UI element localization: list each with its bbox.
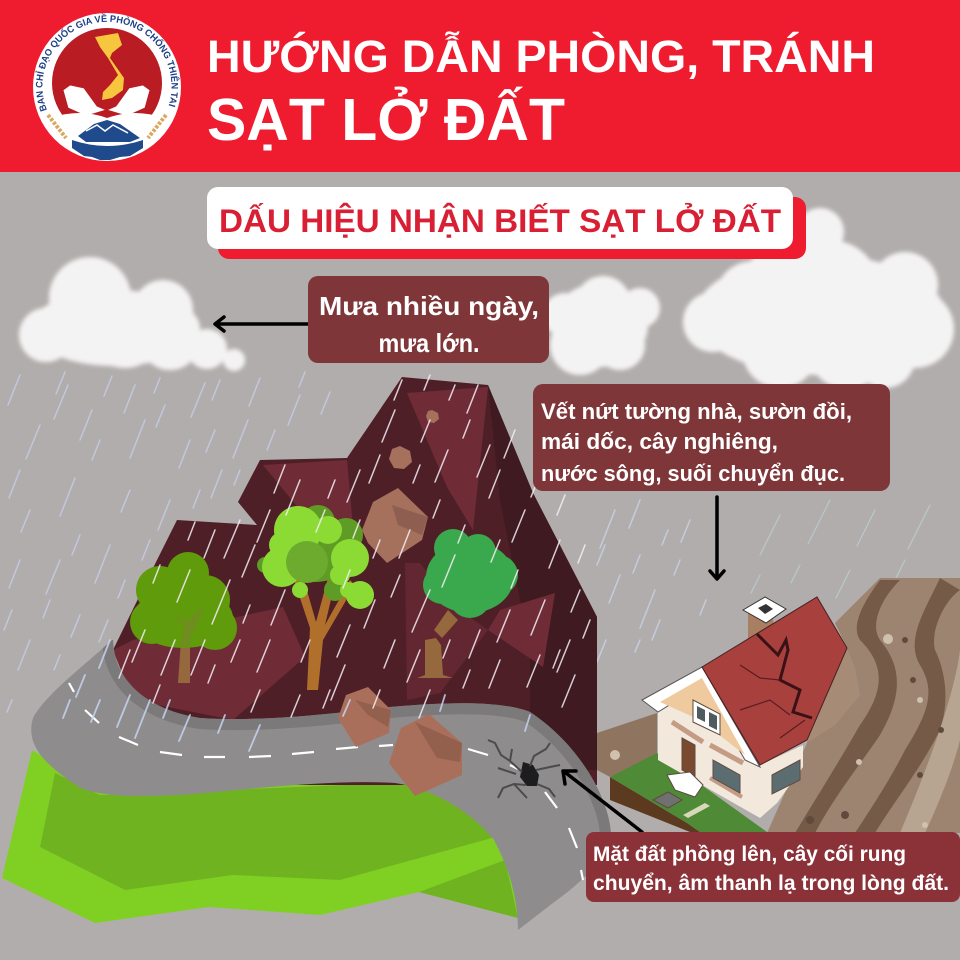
- tree: left: [130, 552, 237, 683]
- arrow: to cloud: [215, 317, 308, 331]
- rocks on road: [338, 687, 462, 796]
- house walls: [658, 672, 803, 818]
- road centre dashes: [69, 683, 583, 880]
- hillside with house: [597, 578, 960, 833]
- mountain: [113, 377, 597, 785]
- chimney: [743, 597, 786, 640]
- cracked roof: [702, 597, 847, 765]
- callout: ground swelling: Mặt đất phồng lên, cây cối rung: [593, 843, 906, 866]
- hillside soil: [597, 578, 960, 833]
- callout: cracks: mái dốc, cây nghiêng,: [541, 429, 778, 454]
- callout: ground swelling: chuyển, âm thanh lạ trong lòng đất.: [593, 872, 949, 895]
- header banner: [0, 0, 960, 172]
- cloud: middle: [543, 276, 660, 375]
- callout: ground swelling: [586, 832, 960, 902]
- title line 1: HƯỚNG DẪN PHÒNG, TRÁNH: [207, 31, 875, 82]
- callout: heavy rain: mưa lớn.: [378, 328, 480, 358]
- ground plot: [610, 777, 700, 832]
- clouds: [19, 208, 954, 389]
- callout: heavy rain: Mưa nhiều ngày,: [319, 291, 539, 321]
- rain in front of scene: [63, 375, 590, 751]
- cloud: right: [683, 208, 954, 389]
- green hill base: [2, 750, 520, 923]
- cloud: left: [19, 257, 245, 371]
- road: [31, 640, 611, 930]
- arrow: to road crack: [563, 771, 642, 832]
- title line 2: SẠT LỞ ĐẤT: [207, 86, 565, 153]
- road crack: [488, 740, 560, 798]
- heading: warning signs: DẤU HIỆU NHẬN BIẾT SẠT LỞ ĐẤT: [219, 203, 781, 239]
- callout: cracks: [533, 384, 890, 491]
- tree: middle: [257, 505, 374, 690]
- tree: right, snapped trunk: [417, 529, 518, 678]
- heading: warning signs: [207, 187, 806, 259]
- callout: cracks: Vết nứt tường nhà, sườn đồi,: [541, 399, 852, 424]
- logo ring text: BAN CHỈ ĐẠO QUỐC GIA VỀ PHÒNG CHỐNG THIÊN TAI: [35, 13, 180, 112]
- house windows and door: [653, 700, 800, 818]
- logo emblem: [33, 13, 181, 161]
- rain behind scene: [4, 372, 930, 712]
- callout: heavy rain: [308, 276, 549, 363]
- callout: cracks: nước sông, suối chuyển đục.: [541, 461, 845, 486]
- falling rocks: [362, 410, 439, 563]
- arrow: to house: [710, 497, 724, 579]
